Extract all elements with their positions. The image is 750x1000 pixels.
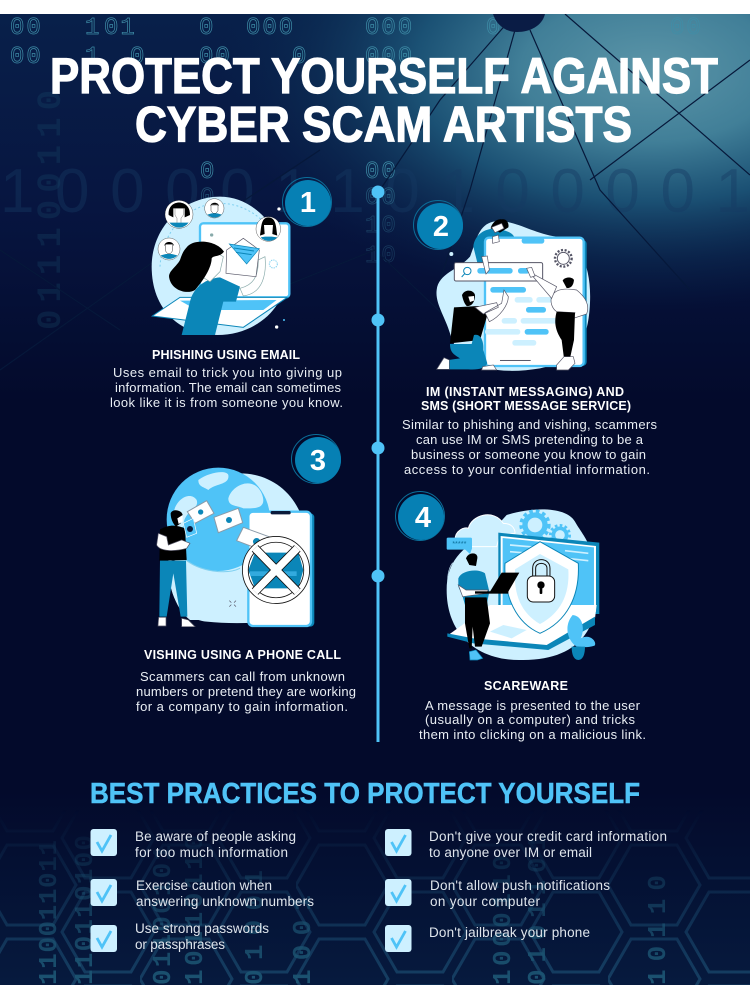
panel: vishing using a phone call: [136, 434, 356, 714]
body text: [136, 669, 356, 714]
checklist item: [385, 829, 667, 860]
body text: [419, 698, 646, 742]
background artwork: 00: [199, 44, 232, 71]
checklist item: [90, 878, 314, 909]
checklist item: Be aware of people asking: [135, 829, 296, 844]
checklist item: on your computer: [430, 894, 540, 909]
panel: best practices: [90, 778, 667, 952]
background artwork: 00: [10, 44, 43, 71]
body text: numbers or pretend they are working: [136, 684, 356, 699]
background artwork: 1: [85, 44, 101, 71]
illustration: people at a giant phone: [436, 219, 590, 371]
checklist item: for too much information: [135, 845, 288, 860]
heading: VISHING USING A PHONE CALL: [144, 648, 341, 662]
background artwork: 01100101: [148, 845, 178, 985]
background artwork: 011100110: [33, 90, 71, 330]
number badge 2: 2: [433, 211, 449, 243]
body text: Similar to phishing and vishing, scammers: [402, 417, 658, 432]
heading: PHISHING USING EMAIL: [152, 348, 300, 362]
background artwork: 10: [365, 243, 398, 270]
illustration: shield, laptop and person: *****: [452, 539, 467, 548]
background artwork: 110011011: [34, 840, 64, 985]
checklist item: to anyone over IM or email: [429, 845, 592, 860]
body text: Uses email to trick you into giving up: [113, 365, 342, 380]
illustration: woman reading email at a laptop: [152, 197, 289, 335]
background artwork: 10110: [643, 875, 673, 985]
background artwork: 1 0 0 0 0 1 1 0 1 0 0 0 0 1: [0, 157, 750, 226]
heading: BEST PRACTICES TO PROTECT YOURSELF: [90, 778, 640, 810]
background artwork: 10110110: [180, 835, 210, 985]
background artwork: 000: [246, 15, 295, 42]
body text: business or someone you know to gain: [411, 447, 646, 462]
body text: Scammers can call from unknown: [140, 669, 345, 684]
checklist item: Don't allow push notifications: [430, 878, 610, 893]
body text: (usually on a computer) and tricks: [425, 712, 636, 727]
heading: IM (INSTANT MESSAGING) AND: [426, 385, 624, 399]
checklist item: or passphrases: [135, 937, 225, 952]
background artwork: 00: [365, 185, 398, 212]
number badge 4: [396, 492, 444, 540]
panel: phishing using email: [110, 178, 343, 410]
checklist item: [90, 921, 269, 952]
background artwork: 10: [365, 213, 398, 240]
body text: can use IM or SMS pretending to be a: [416, 432, 644, 447]
title: CYBER SCAM ARTISTS: [135, 96, 632, 152]
background artwork: 01: [104, 15, 137, 42]
checklist item: Don't jailbreak your phone: [429, 925, 590, 940]
background artwork: 000: [365, 44, 414, 71]
illustration: shield, laptop and person: [447, 509, 599, 660]
checklist item: Don't give your credit card information: [429, 829, 667, 844]
number badge 3: 3: [310, 445, 326, 477]
panel: scareware: [396, 492, 646, 742]
background artwork: 0: [292, 44, 308, 71]
heading: SCAREWARE: [484, 679, 568, 693]
background artwork: 0: [486, 15, 502, 42]
heading: [421, 385, 631, 413]
checklist item: [385, 925, 590, 952]
body text: [110, 365, 343, 410]
background artwork: 1: [85, 15, 101, 42]
number badge 3: [292, 434, 341, 484]
background artwork: 01001: [240, 870, 270, 985]
body text: [402, 417, 658, 477]
body text: A message is presented to the user: [425, 698, 641, 713]
title: [50, 48, 718, 152]
checklist item: Exercise caution when: [136, 878, 272, 893]
background artwork: 1000110: [488, 855, 518, 985]
background artwork: 0: [200, 159, 216, 186]
illustration: globe, phone and blocked card: [157, 468, 314, 627]
number badge 4: 4: [415, 502, 431, 534]
checklist item: [90, 829, 296, 860]
number badge 1: 1: [300, 187, 316, 219]
timeline: [372, 186, 384, 742]
background artwork: 0: [199, 15, 215, 42]
number badge 1: [282, 178, 332, 226]
checklist item: [385, 878, 610, 909]
background artwork: 00: [10, 15, 43, 42]
background artwork: 00: [670, 15, 703, 42]
body text: information. The email can sometimes: [115, 380, 342, 395]
background artwork: 0: [200, 185, 216, 212]
background artwork: 0: [130, 44, 146, 71]
body text: access to your confidential information.: [404, 462, 650, 477]
checklist item: answering unknown numbers: [136, 894, 314, 909]
heading: SMS (SHORT MESSAGE SERVICE): [421, 399, 631, 413]
number badge 2: [414, 200, 463, 250]
background artwork: 00: [365, 159, 398, 186]
background artwork: 0101101: [523, 835, 553, 985]
body text: them into clicking on a malicious link.: [419, 727, 646, 742]
body text: look like it is from someone you know.: [110, 395, 343, 410]
panel: IM and SMS: [402, 200, 658, 477]
body text: for a company to gain information.: [136, 699, 348, 714]
background artwork: 1001: [288, 895, 318, 985]
background artwork: 110110100: [70, 835, 100, 985]
background artwork: 000: [365, 15, 414, 42]
checklist item: Use strong passwords: [135, 921, 269, 936]
